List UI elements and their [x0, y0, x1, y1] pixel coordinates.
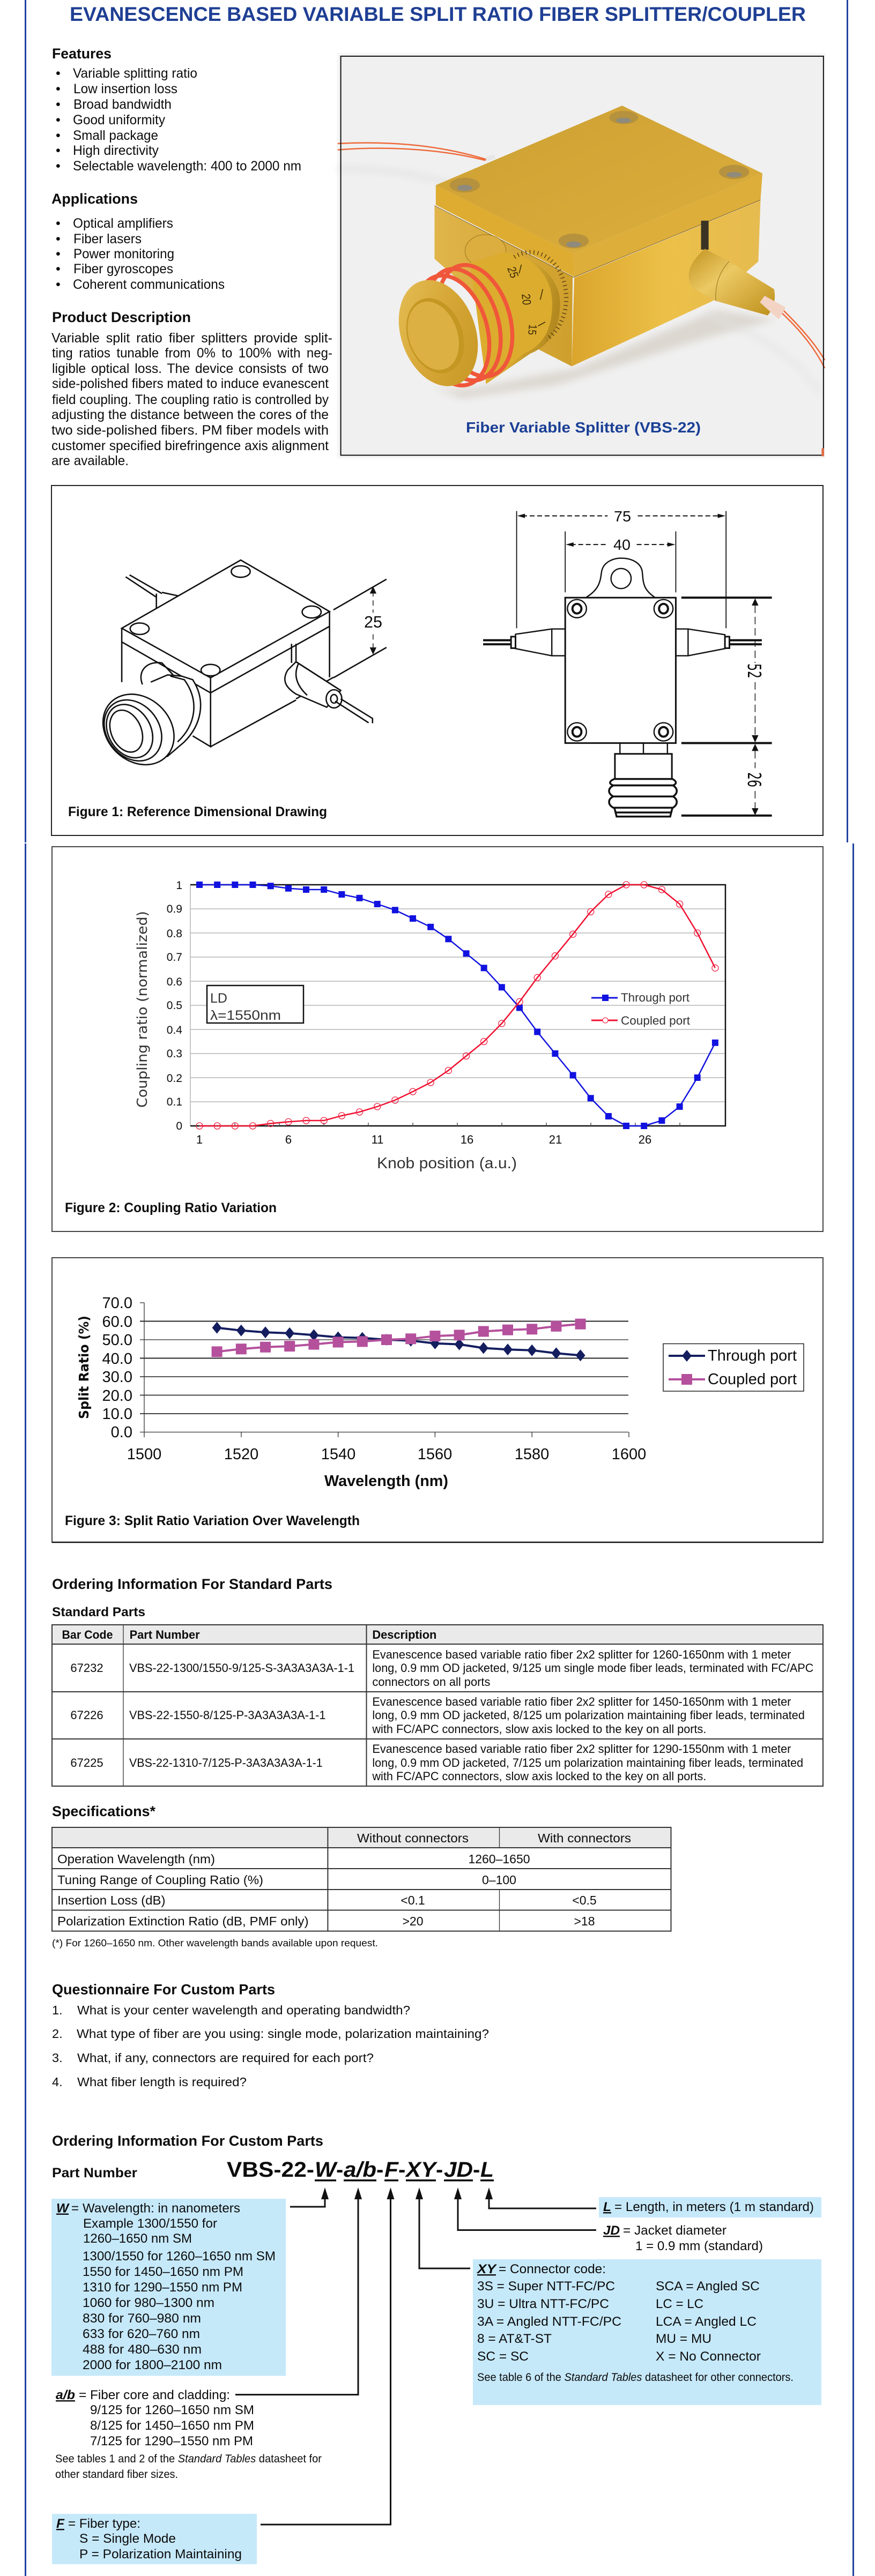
row 67226	[70, 1695, 805, 1736]
applications list: Fiber gyroscopes	[73, 262, 173, 277]
x axis labels	[127, 1446, 646, 1463]
box: connector code: LC = LC	[656, 2297, 703, 2311]
note: jacket diameter: JD	[603, 2223, 620, 2238]
features list	[56, 66, 301, 174]
specification values: <0.5	[572, 1893, 597, 1907]
applications list: •	[56, 262, 61, 277]
features list: Small package	[73, 128, 158, 143]
questions list: 3.	[52, 2051, 63, 2065]
panel: figure 2 coupling ratio variation	[52, 847, 823, 1231]
row 67232: long, 0.9 mm OD jacketed, 9/125 um single mode fiber leads, terminated with FC/APC	[372, 1661, 814, 1675]
questions list	[52, 2003, 489, 2089]
box: length: L	[603, 2200, 611, 2214]
note: fiber core and cladding: 8/125 for 1450–1650 nm PM	[90, 2418, 254, 2433]
description text: field coupling. The coupling ratio is controlled by	[52, 392, 329, 407]
features list: •	[56, 97, 61, 112]
dimension labels: 75	[614, 508, 631, 525]
row 67226: 67226	[70, 1708, 103, 1722]
box: wavelength: 633 for 620–760 nm	[83, 2327, 200, 2341]
y axis title: Coupling ratio (normalized)	[135, 911, 151, 1108]
questions list: 4.	[52, 2075, 63, 2089]
questions list: 1.	[52, 2003, 63, 2017]
box: connector code: 3U = Ultra NTT-FC/PC	[477, 2297, 609, 2311]
table: standard parts	[52, 1625, 823, 1786]
part number code: XY	[405, 2158, 438, 2182]
features list: •	[56, 143, 61, 158]
applications list: •	[56, 277, 61, 292]
panel: product photo	[337, 53, 825, 458]
part number code: -	[436, 2158, 443, 2182]
part number code: L	[480, 2158, 494, 2182]
row 67232: 67232	[70, 1661, 103, 1675]
applications list: Coherent communications	[73, 277, 225, 292]
features list: Broad bandwidth	[73, 97, 172, 112]
y axis labels: 0.3	[167, 1048, 182, 1060]
y axis labels: 0.1	[167, 1096, 182, 1108]
box: wavelength: Example 1300/1550 for	[83, 2216, 217, 2231]
y axis labels: 60.0	[102, 1313, 132, 1331]
note: jacket diameter	[603, 2223, 763, 2253]
y axis labels	[167, 879, 182, 1132]
part number label: Part Number	[52, 2166, 137, 2181]
y axis labels: 0.0	[111, 1424, 132, 1441]
specification values: <0.1	[401, 1893, 425, 1907]
dimension labels: 26	[743, 772, 765, 787]
table: specifications	[52, 1827, 671, 1931]
description text: two side-polished fibers. PM fiber models with	[51, 423, 329, 438]
row 67226: with FC/APC connectors, slow axis locked to the key on all ports.	[372, 1722, 706, 1736]
box: connector code: = Connector code:	[499, 2262, 606, 2276]
description text	[51, 331, 332, 468]
note: jacket diameter: 1 = 0.9 mm (standard)	[635, 2239, 763, 2253]
box: fiber type: S = Single Mode	[79, 2532, 176, 2546]
features list: Good uniformity	[73, 113, 165, 128]
heading: product description: Product Description	[52, 309, 191, 325]
part number code: F	[384, 2158, 399, 2182]
features list: •	[56, 159, 61, 174]
y axis labels: 1	[176, 879, 182, 892]
dial barrel	[470, 252, 560, 384]
line chart: split ratio vs wavelength	[76, 1295, 804, 1490]
applications list: Fiber lasers	[73, 232, 142, 247]
row 67226: Evanescence based variable ratio fiber 2x2 splitter for 1450-1650nm with 1 meter	[372, 1695, 791, 1708]
note: fiber core and cladding: 9/125 for 1260–1650 nm SM	[90, 2403, 254, 2417]
specifications footnote: (*) For 1260–1650 nm. Other wavelength bands available upon request.	[52, 1938, 378, 1948]
series: coupled port	[199, 885, 715, 1126]
box: connector code: 3A = Angled NTT-FC/PC	[477, 2314, 621, 2329]
part number code: W	[315, 2158, 338, 2182]
applications list: •	[56, 216, 61, 231]
y axis labels: 0.8	[167, 928, 182, 940]
y axis labels	[102, 1295, 132, 1441]
dimension label: 25: 25	[364, 613, 382, 631]
panel: figure 3 split ratio variation over wavelength	[52, 1258, 823, 1542]
box: wavelength: 1300/1550 for 1260–1650 nm SM	[83, 2249, 276, 2264]
photo: gold variable splitter	[337, 53, 825, 458]
panel: questionnaire for custom parts	[52, 1982, 489, 2089]
panel: applications	[51, 191, 225, 292]
note: fiber core and cladding	[55, 2388, 322, 2481]
y axis labels: 0.5	[167, 999, 182, 1012]
specification values: Without connectors	[357, 1831, 469, 1845]
fibers left	[338, 143, 486, 160]
box: connector code: LCA = Angled LC	[656, 2314, 757, 2329]
x axis title: Knob position (a.u.)	[377, 1155, 517, 1172]
description text: are available.	[51, 453, 129, 468]
legend: Coupled port	[708, 1371, 797, 1388]
box: wavelength	[51, 2199, 286, 2376]
specification values: Tuning Range of Coupling Ratio (%)	[57, 1873, 263, 1887]
box: wavelength: 488 for 480–630 nm	[83, 2342, 202, 2357]
applications list: •	[56, 247, 61, 262]
LD annotation box	[207, 985, 303, 1023]
description text: ting ratios tunable from 0% to 100% with neg-	[52, 346, 332, 361]
heading: applications: Applications	[51, 191, 138, 207]
row 67225: with FC/APC connectors, slow axis locked to the key on all ports.	[372, 1769, 706, 1783]
specification values: Polarization Extinction Ratio (dB, PMF only)	[57, 1914, 309, 1928]
drawing: top view	[483, 511, 772, 817]
part number code: VBS-22-	[227, 2158, 314, 2182]
box: connector code	[473, 2259, 821, 2405]
y axis labels: 40.0	[102, 1350, 132, 1368]
box: fiber type	[52, 2514, 257, 2564]
features list: High directivity	[73, 143, 159, 158]
box: connector code: 8 = AT&T-ST	[477, 2332, 552, 2346]
description text: customer specified birefringence axis alignment	[51, 438, 329, 453]
x axis labels: 11	[372, 1133, 383, 1146]
features list: •	[56, 113, 61, 128]
photo: gold variable splitter: 20	[519, 293, 533, 305]
series: coupled port	[217, 1324, 581, 1352]
y axis labels: 0.2	[167, 1072, 182, 1085]
specification values: With connectors	[538, 1831, 631, 1845]
box: wavelength: 1310 for 1290–1550 nm PM	[83, 2280, 242, 2295]
y axis labels: 50.0	[102, 1332, 132, 1349]
applications list: •	[56, 232, 61, 247]
row 67232: VBS-22-1300/1550-9/125-S-3A3A3A3A-1-1	[129, 1661, 354, 1675]
orange rings	[404, 259, 524, 391]
x axis labels: 26	[639, 1133, 651, 1146]
specification values: Insertion Loss (dB)	[57, 1893, 165, 1907]
table header: Description	[372, 1628, 436, 1641]
y axis labels: 0.9	[167, 903, 182, 915]
note: fiber core and cladding: 7/125 for 1290–1550 nm PM	[90, 2434, 253, 2448]
dimension labels: 52	[743, 663, 765, 678]
dimension labels: 40	[613, 536, 631, 553]
box: connector code: XY	[476, 2262, 498, 2276]
part number code: a/b	[344, 2158, 376, 2182]
box: connector code: X = No Connector	[656, 2349, 761, 2364]
note: fiber core and cladding: other standard fiber sizes.	[55, 2468, 178, 2481]
panel: figure 1 reference dimensional drawing	[51, 486, 823, 835]
series: through port	[217, 1328, 581, 1355]
note: fiber core and cladding: See tables 1 and 2 of the Standard Tables datasheet for	[55, 2453, 322, 2465]
row 67225	[70, 1742, 803, 1783]
legend: Through port	[708, 1347, 797, 1364]
screws	[450, 111, 749, 248]
y axis labels: 70.0	[102, 1295, 132, 1312]
legend	[663, 1344, 804, 1391]
description text: ligible optical loss. The device consists of two	[52, 361, 329, 376]
x axis labels: 1600	[612, 1446, 646, 1463]
box: length: = Length, in meters (1 m standard)	[614, 2200, 814, 2214]
x axis labels: 21	[549, 1133, 562, 1146]
part number code	[227, 2158, 494, 2182]
specification values: Operation Wavelength (nm)	[57, 1852, 215, 1866]
row 67225: Evanescence based variable ratio fiber 2x2 splitter for 1290-1550nm with 1 meter	[372, 1742, 791, 1756]
panel: product description	[51, 309, 332, 468]
title: EVANESCENCE BASED VARIABLE SPLIT RATIO FIBER SPLITTER/COUPLER	[70, 3, 806, 25]
box: wavelength: 830 for 760–980 nm	[83, 2311, 201, 2326]
x axis labels: 1560	[418, 1446, 452, 1463]
box faces	[434, 206, 573, 366]
box: wavelength: W	[56, 2201, 70, 2215]
note: fiber core and cladding: a/b	[56, 2388, 75, 2402]
row 67232: connectors on all ports	[372, 1675, 490, 1689]
heading: specifications: Specifications*	[52, 1803, 155, 1819]
table header: Bar Code	[62, 1628, 113, 1641]
applications list	[56, 216, 225, 292]
LD annotation box: λ=1550nm	[210, 1008, 281, 1023]
box: connector code: See table 6 of the Standard Tables datasheet for other connectors.	[477, 2371, 794, 2384]
legend: Through port	[621, 991, 689, 1004]
x axis labels: 1540	[321, 1446, 355, 1463]
box: fiber type: F	[56, 2517, 65, 2531]
description text: side-polished fibers mated to induce evanescent	[52, 376, 329, 391]
part number code: JD	[444, 2158, 473, 2182]
panel: features	[52, 46, 301, 174]
description text: adjusting the distance between the cores of the	[51, 407, 329, 422]
box: wavelength: = Wavelength: in nanometers	[71, 2201, 240, 2215]
box: wavelength: 1060 for 980–1300 nm	[83, 2296, 214, 2310]
x axis labels: 6	[285, 1133, 292, 1146]
hole in body	[465, 235, 506, 267]
row 67226: long, 0.9 mm OD jacketed, 8/125 um polarization maintaining fiber leads, terminated	[372, 1708, 805, 1722]
applications list: Optical amplifiers	[73, 216, 173, 231]
drawing: isometric view	[95, 560, 387, 766]
note: jacket diameter: = Jacket diameter	[623, 2223, 726, 2238]
y axis title: Split Ratio (%)	[76, 1316, 92, 1419]
series: through port	[199, 885, 715, 1126]
knob cap	[387, 273, 490, 393]
box: length	[599, 2197, 821, 2217]
box: connector code: 3S = Super NTT-FC/PC	[477, 2279, 615, 2294]
row 67226: VBS-22-1550-8/125-P-3A3A3A3A-1-1	[129, 1708, 326, 1722]
features list: Low insertion loss	[73, 81, 177, 96]
y axis labels: 0.7	[167, 951, 182, 964]
x axis labels: 1	[196, 1133, 203, 1146]
features list: Variable splitting ratio	[73, 66, 197, 81]
x axis labels: 16	[461, 1133, 473, 1146]
specification values: 1260–1650	[468, 1852, 530, 1866]
box: wavelength: 2000 for 1800–2100 nm	[83, 2358, 222, 2372]
y axis labels: 0	[176, 1120, 182, 1132]
heading: features: Features	[52, 46, 112, 62]
features list: •	[56, 128, 61, 143]
questions list: 2.	[52, 2027, 63, 2041]
y axis labels: 0.6	[167, 976, 182, 988]
legend: Coupled port	[621, 1014, 690, 1027]
heading: questionnaire: Questionnaire For Custom Parts	[52, 1982, 275, 1998]
box: wavelength: 1550 for 1450–1650 nm PM	[83, 2265, 243, 2279]
box: connector code: MU = MU	[656, 2332, 711, 2346]
y axis labels: 30.0	[102, 1369, 132, 1386]
features list: Selectable wavelength: 400 to 2000 nm	[73, 159, 301, 174]
photo: gold variable splitter: 15	[525, 324, 539, 335]
description text: Variable split ratio fiber splitters provide split-	[51, 331, 332, 346]
x axis labels	[196, 1133, 651, 1146]
box: fiber type: = Fiber type:	[68, 2517, 140, 2531]
legend	[591, 991, 690, 1027]
questions list: What is your center wavelength and operating bandwidth?	[77, 2003, 410, 2017]
features list: •	[56, 66, 61, 81]
y axis labels: 10.0	[102, 1406, 132, 1423]
y axis labels: 20.0	[102, 1387, 132, 1405]
x axis labels: 1580	[515, 1446, 549, 1463]
line chart: coupling ratio vs knob position	[135, 879, 725, 1172]
table header: Part Number	[130, 1628, 200, 1641]
specification values	[57, 1831, 631, 1928]
specification values: 0–100	[482, 1873, 516, 1887]
heading: ordering information for custom parts: Ordering Information For Custom Parts	[52, 2133, 323, 2149]
box: connector code: SC = SC	[477, 2349, 529, 2364]
part number code: -	[336, 2158, 343, 2182]
applications list: Power monitoring	[73, 247, 174, 262]
subheading: standard parts: Standard Parts	[52, 1605, 145, 1619]
features list: •	[56, 81, 61, 96]
note: fiber core and cladding: = Fiber core and cladding:	[79, 2388, 230, 2402]
y axis labels: 0.4	[167, 1024, 182, 1036]
specification values: >18	[574, 1914, 595, 1928]
questions list: What type of fiber are you using: single mode, polarization maintaining?	[77, 2027, 489, 2041]
photo: gold variable splitter: 25	[505, 265, 521, 279]
table header	[62, 1628, 436, 1641]
box: wavelength: 1260–1650 nm SM	[83, 2231, 192, 2246]
row 67225: VBS-22-1310-7/125-P-3A3A3A3A-1-1	[129, 1756, 323, 1769]
part number code: -	[398, 2158, 405, 2182]
questions list: What, if any, connectors are required for each port?	[77, 2051, 374, 2065]
x axis labels: 1520	[224, 1446, 258, 1463]
connector right	[689, 249, 775, 316]
row 67232: Evanescence based variable ratio fiber 2x2 splitter for 1260-1650nm with 1 meter	[372, 1648, 791, 1661]
figure 1 caption: Figure 1: Reference Dimensional Drawing	[68, 804, 327, 819]
row 67232	[70, 1648, 814, 1689]
part number code: -	[376, 2158, 383, 2182]
row 67225: long, 0.9 mm OD jacketed, 7/125 um polarization maintaining fiber leads, terminated	[372, 1756, 803, 1769]
questions list: What fiber length is required?	[77, 2075, 247, 2089]
x axis labels: 1500	[127, 1446, 161, 1463]
part number code: -	[473, 2158, 480, 2182]
figure 2 caption: Figure 2: Coupling Ratio Variation	[65, 1200, 277, 1215]
x axis title: Wavelength (nm)	[324, 1473, 448, 1490]
specification values: >20	[402, 1914, 424, 1928]
box: connector code: SCA = Angled SC	[656, 2279, 760, 2294]
row 67225: 67225	[70, 1756, 103, 1769]
arrows: connect fields to descriptions	[235, 2187, 596, 2525]
box: fiber type: P = Polarization Maintaining	[79, 2547, 242, 2562]
LD annotation box: LD	[210, 991, 227, 1006]
dimension labels	[613, 508, 765, 787]
photo caption: Fiber Variable Splitter (VBS-22)	[466, 419, 701, 436]
figure 3 caption: Figure 3: Split Ratio Variation Over Wavelength	[65, 1513, 360, 1528]
panel: part number diagram	[51, 2158, 821, 2564]
heading: ordering information for standard parts: Ordering Information For Standard Parts	[52, 1576, 332, 1592]
